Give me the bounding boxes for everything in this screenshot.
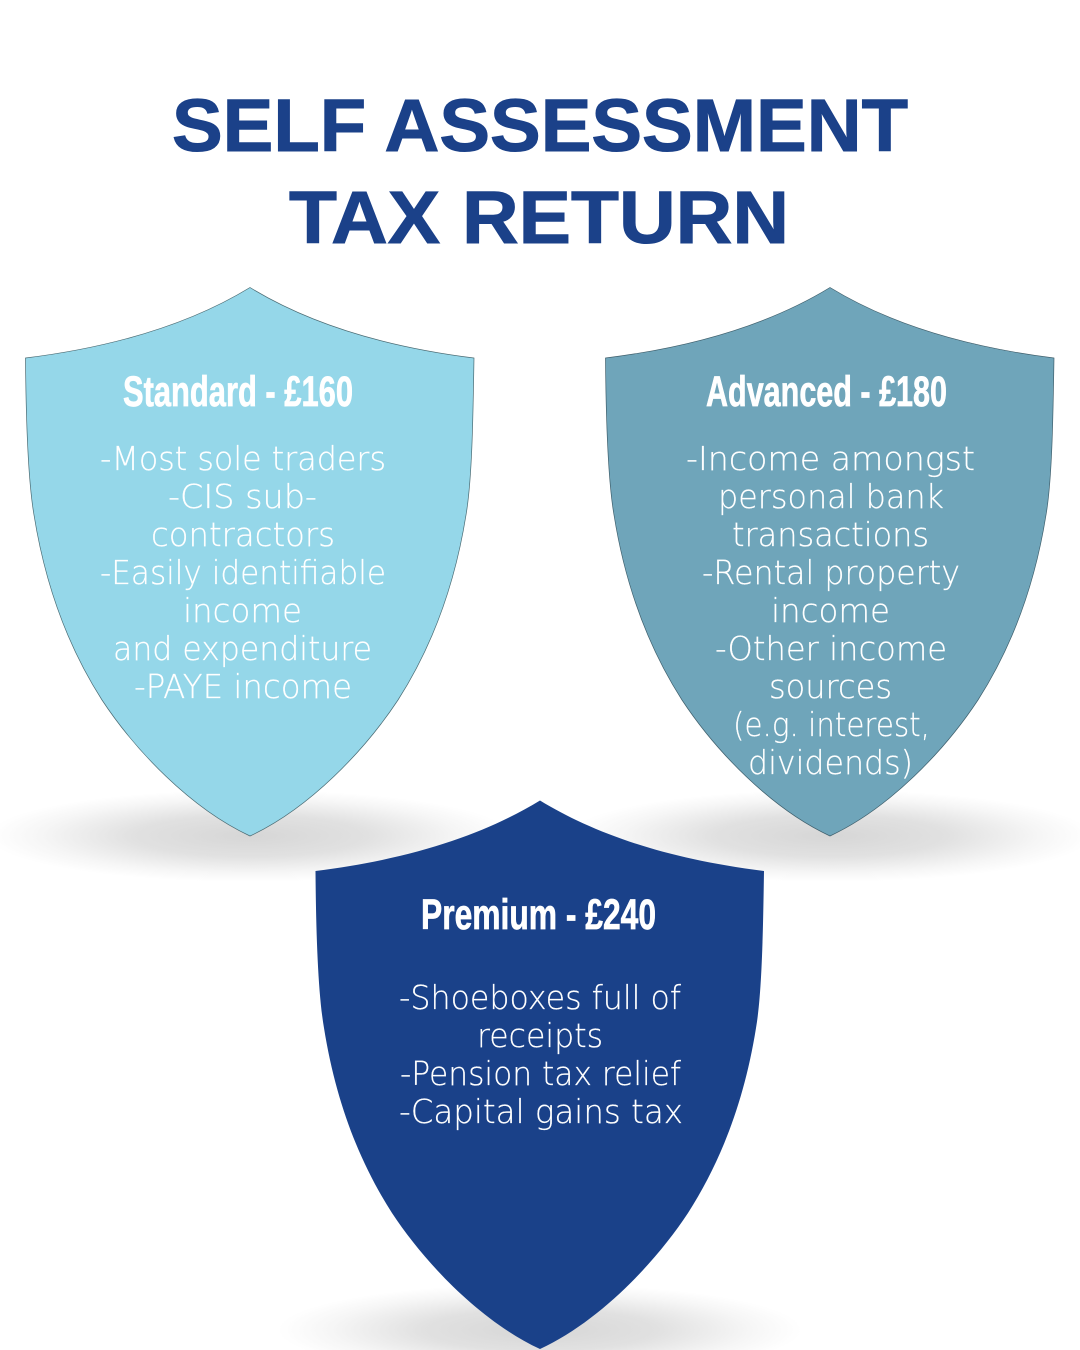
- title: [172, 84, 908, 259]
- heading: standard price: Standard - £160: [123, 368, 353, 416]
- text: premium features: -Pension tax relief: [400, 1054, 681, 1093]
- text: advanced features: personal bank: [718, 477, 944, 516]
- text: advanced features: -Other income: [715, 629, 947, 668]
- text: advanced features: (e.g. interest,: [733, 705, 930, 744]
- text: standard features: -PAYE income: [134, 667, 352, 706]
- panel: premium shield: [316, 800, 764, 1349]
- text: advanced features: transactions: [732, 515, 929, 554]
- text: advanced features: -Rental property: [702, 553, 960, 592]
- shadow: bottom shield: [278, 1284, 802, 1350]
- text: standard features: -Most sole traders: [100, 439, 386, 478]
- text: advanced features: sources: [769, 667, 892, 706]
- text: premium features: [399, 978, 683, 1131]
- text: advanced features: income: [771, 591, 890, 630]
- text: standard features: [100, 439, 386, 706]
- shadow: right shield: [568, 790, 1080, 882]
- heading: premium price: Premium - £240: [421, 891, 656, 939]
- panel: standard shield: [26, 288, 474, 836]
- heading: advanced price: Advanced - £180: [706, 368, 947, 416]
- text: premium features: -Capital gains tax: [399, 1092, 683, 1131]
- text: advanced features: [686, 439, 975, 782]
- panel: advanced shield: [606, 288, 1054, 836]
- text: premium features: receipts: [477, 1016, 603, 1055]
- title: SELF ASSESSMENT: [172, 84, 908, 167]
- title: TAX RETURN: [289, 176, 789, 259]
- text: premium features: -Shoeboxes full of: [399, 978, 681, 1017]
- text: standard features: income: [183, 591, 302, 630]
- text: standard features: and expenditure: [113, 629, 372, 668]
- text: standard features: contractors: [151, 515, 335, 554]
- text: standard features: -CIS sub-: [168, 477, 317, 516]
- shadow: left shield: [0, 790, 512, 882]
- text: advanced features: dividends): [748, 743, 913, 782]
- text: standard features: -Easily identifiable: [100, 553, 386, 592]
- text: advanced features: -Income amongst: [686, 439, 975, 478]
